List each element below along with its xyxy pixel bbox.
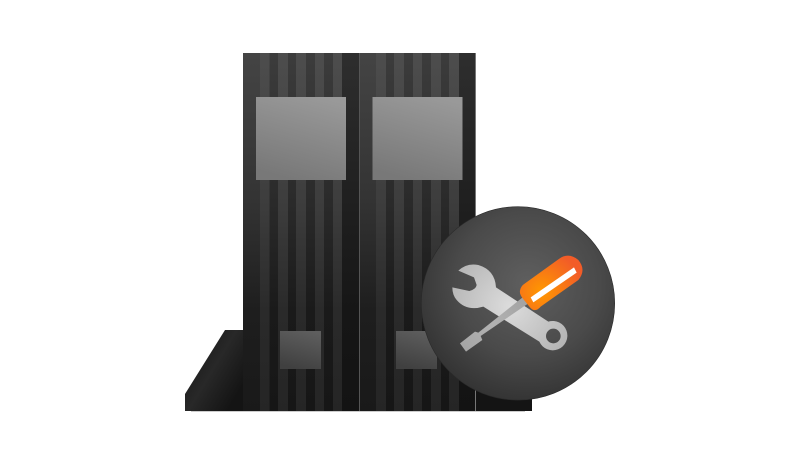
- icon: wrench and screwdriver: [452, 256, 582, 352]
- left lower panel: [280, 331, 321, 369]
- icon: wrench: [452, 264, 567, 350]
- icon: handle highlight: [531, 267, 577, 302]
- left upper window: [256, 97, 346, 180]
- platform base: [185, 330, 532, 412]
- right lower panel: [396, 331, 437, 369]
- right upper window: [372, 97, 462, 180]
- maintenance badge: [421, 207, 615, 400]
- server rack left: [243, 53, 359, 411]
- icon: screwdriver shaft: [460, 297, 528, 352]
- icon: screwdriver handle: [520, 256, 582, 310]
- server rack right: [359, 53, 476, 411]
